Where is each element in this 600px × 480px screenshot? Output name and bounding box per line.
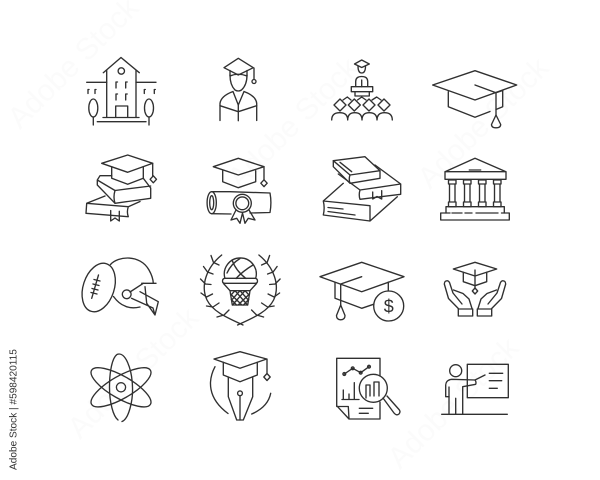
icon: graduate [220,58,257,121]
icon glyph: dollar sign: $ [384,296,394,316]
icon: stack of books [323,157,401,221]
icon: hands holding cap [444,262,506,316]
icon: pen nib with cap [210,352,271,420]
icon: report with magnifier [337,358,400,419]
icon: books with cap [86,155,156,221]
icon: mortarboard [433,71,517,128]
icon: football and helmet [76,258,158,316]
credit: vertical stock id: Adobe Stock | #598420115 [8,349,20,470]
icon: speaker at podium with audience [332,60,392,120]
icon: bank building [441,158,509,220]
icon: diploma with cap [207,158,271,223]
icon: graduation cap with dollar coin [320,262,404,321]
icon: teacher at board [442,364,508,414]
stock watermark text: Adobe Stock [382,331,526,475]
stock watermark text: Adobe Stock [222,51,366,195]
icon: atom [86,354,156,422]
stock watermark text: Adobe Stock [412,51,556,195]
icon: school building [87,58,156,125]
icon: basketball hoop in laurel wreath [200,255,280,325]
stock watermark text: Adobe Stock [62,301,206,445]
